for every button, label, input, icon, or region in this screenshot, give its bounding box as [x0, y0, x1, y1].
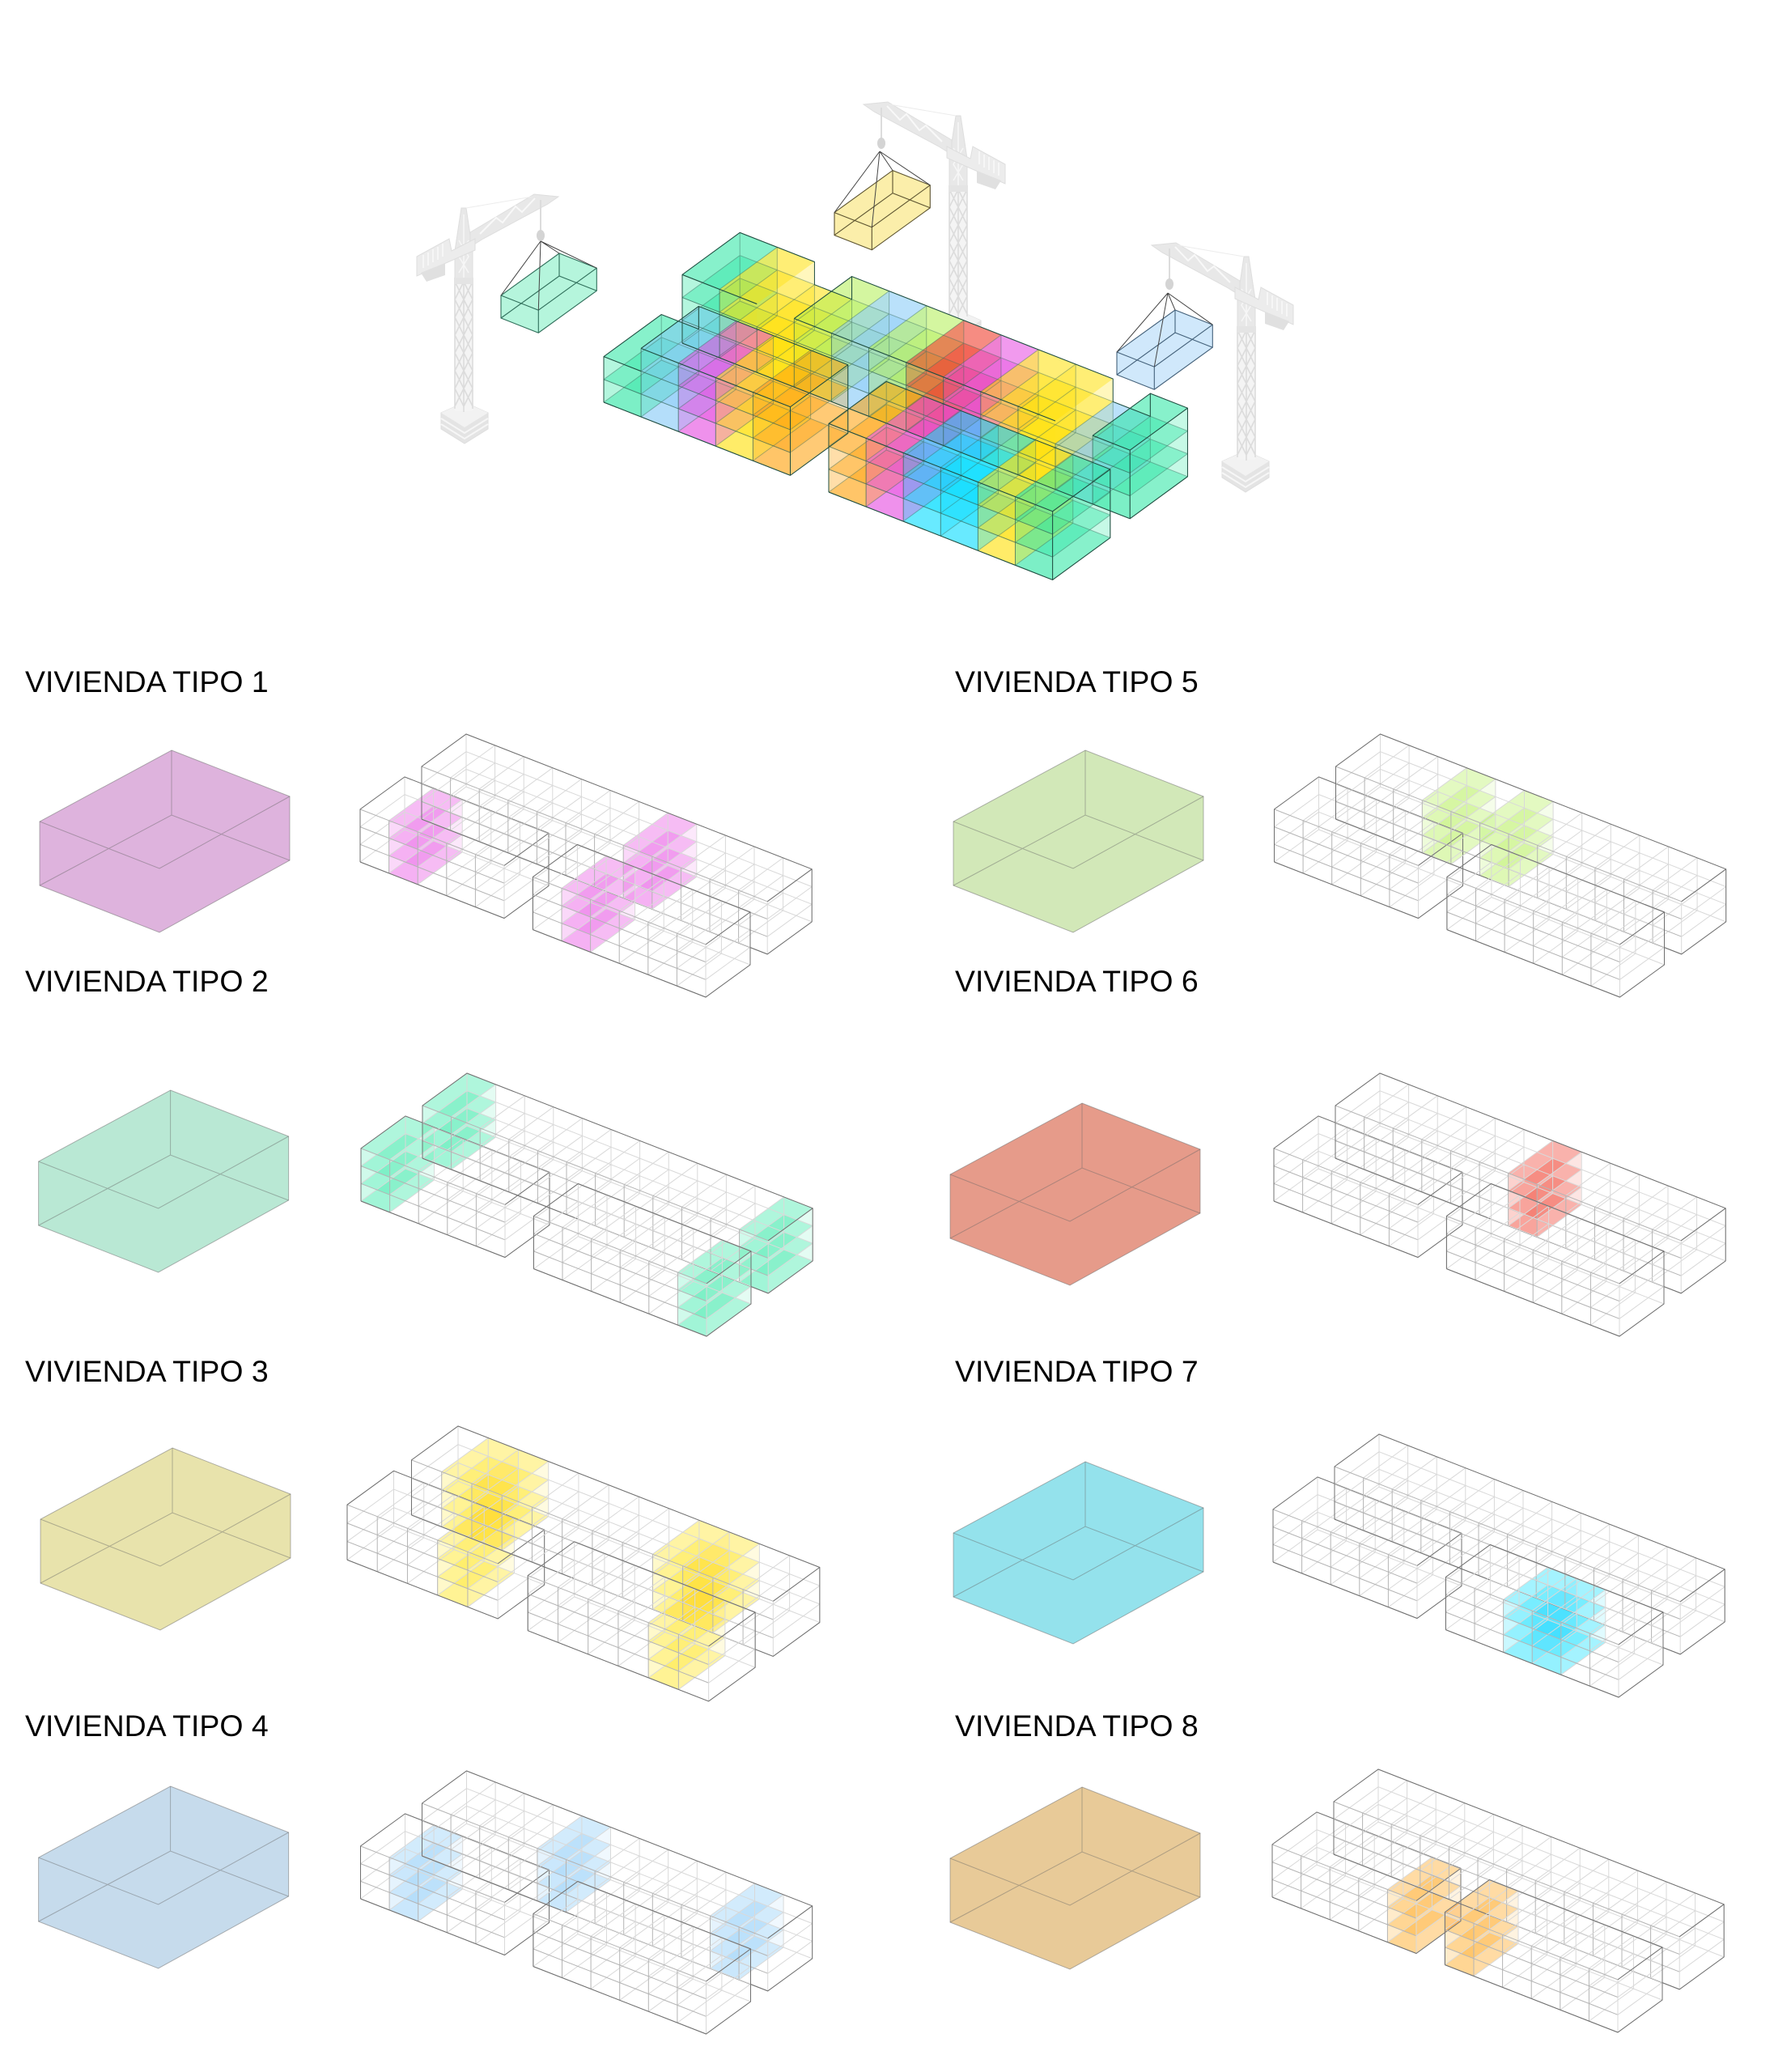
- highlighted columns light green: [1422, 768, 1553, 887]
- heading: VIVIENDA TIPO 1: [25, 664, 269, 698]
- icon: centre crane: [864, 102, 1005, 351]
- panel: vivienda tipo 8: [950, 1709, 1724, 2032]
- icon: unit volume green: [39, 1090, 289, 1272]
- heading: VIVIENDA TIPO 5: [955, 664, 1199, 698]
- panel: vivienda tipo 4: [25, 1709, 813, 2034]
- icon: unit volume yellow: [40, 1448, 291, 1630]
- heading: VIVIENDA TIPO 8: [955, 1709, 1199, 1743]
- panel: vivienda tipo 1: [25, 664, 812, 997]
- icon: right crane: [1152, 243, 1293, 492]
- panel: vivienda tipo 7: [953, 1354, 1725, 1697]
- hero building wireframe: back block: [682, 232, 1187, 519]
- cargo: blue module: [1117, 293, 1212, 389]
- icon: left crane: [417, 194, 558, 444]
- highlighted columns yellow: [438, 1437, 759, 1689]
- icon: unit volume light green: [953, 750, 1203, 932]
- icon: unit volume cyan: [953, 1462, 1203, 1644]
- highlighted columns green: [361, 1073, 813, 1336]
- building wireframe: [360, 734, 812, 997]
- panel: vivienda tipo 2: [25, 964, 813, 1336]
- highlighted column red: [1509, 1140, 1581, 1237]
- heading: VIVIENDA TIPO 4: [25, 1709, 269, 1743]
- building wireframe: [1272, 1769, 1724, 2032]
- hero building wireframe: front right block: [829, 381, 1110, 580]
- building wireframe: [361, 1073, 813, 1336]
- highlighted columns cyan: [1504, 1567, 1606, 1675]
- icon: unit volume orange: [950, 1787, 1200, 1969]
- building wireframe: [1274, 1073, 1725, 1336]
- panel: vivienda tipo 6: [950, 964, 1725, 1336]
- panel: vivienda tipo 3: [25, 1354, 820, 1701]
- cargo: green module: [501, 241, 596, 333]
- building wireframe: [361, 1771, 813, 2034]
- building wireframe: [347, 1426, 820, 1701]
- heading: VIVIENDA TIPO 6: [955, 964, 1199, 998]
- icon: unit volume red: [950, 1103, 1200, 1285]
- heading: VIVIENDA TIPO 7: [955, 1354, 1199, 1388]
- building wireframe: [1274, 734, 1726, 997]
- hero building wireframe: front left block: [604, 306, 848, 475]
- icon: unit volume pink: [40, 750, 290, 932]
- heading: VIVIENDA TIPO 3: [25, 1354, 269, 1388]
- building wireframe: [1273, 1434, 1725, 1697]
- icon: unit volume blue: [39, 1786, 289, 1968]
- highlighted columns pink: [389, 788, 697, 952]
- heading: VIVIENDA TIPO 2: [25, 964, 269, 998]
- illustration: construction hero: [417, 102, 1293, 580]
- hero building colour columns: [604, 232, 1187, 580]
- highlighted columns blue: [389, 1816, 783, 1980]
- cargo: yellow module: [834, 151, 930, 250]
- panel: vivienda tipo 5: [953, 664, 1726, 997]
- highlighted columns orange: [1387, 1857, 1518, 1976]
